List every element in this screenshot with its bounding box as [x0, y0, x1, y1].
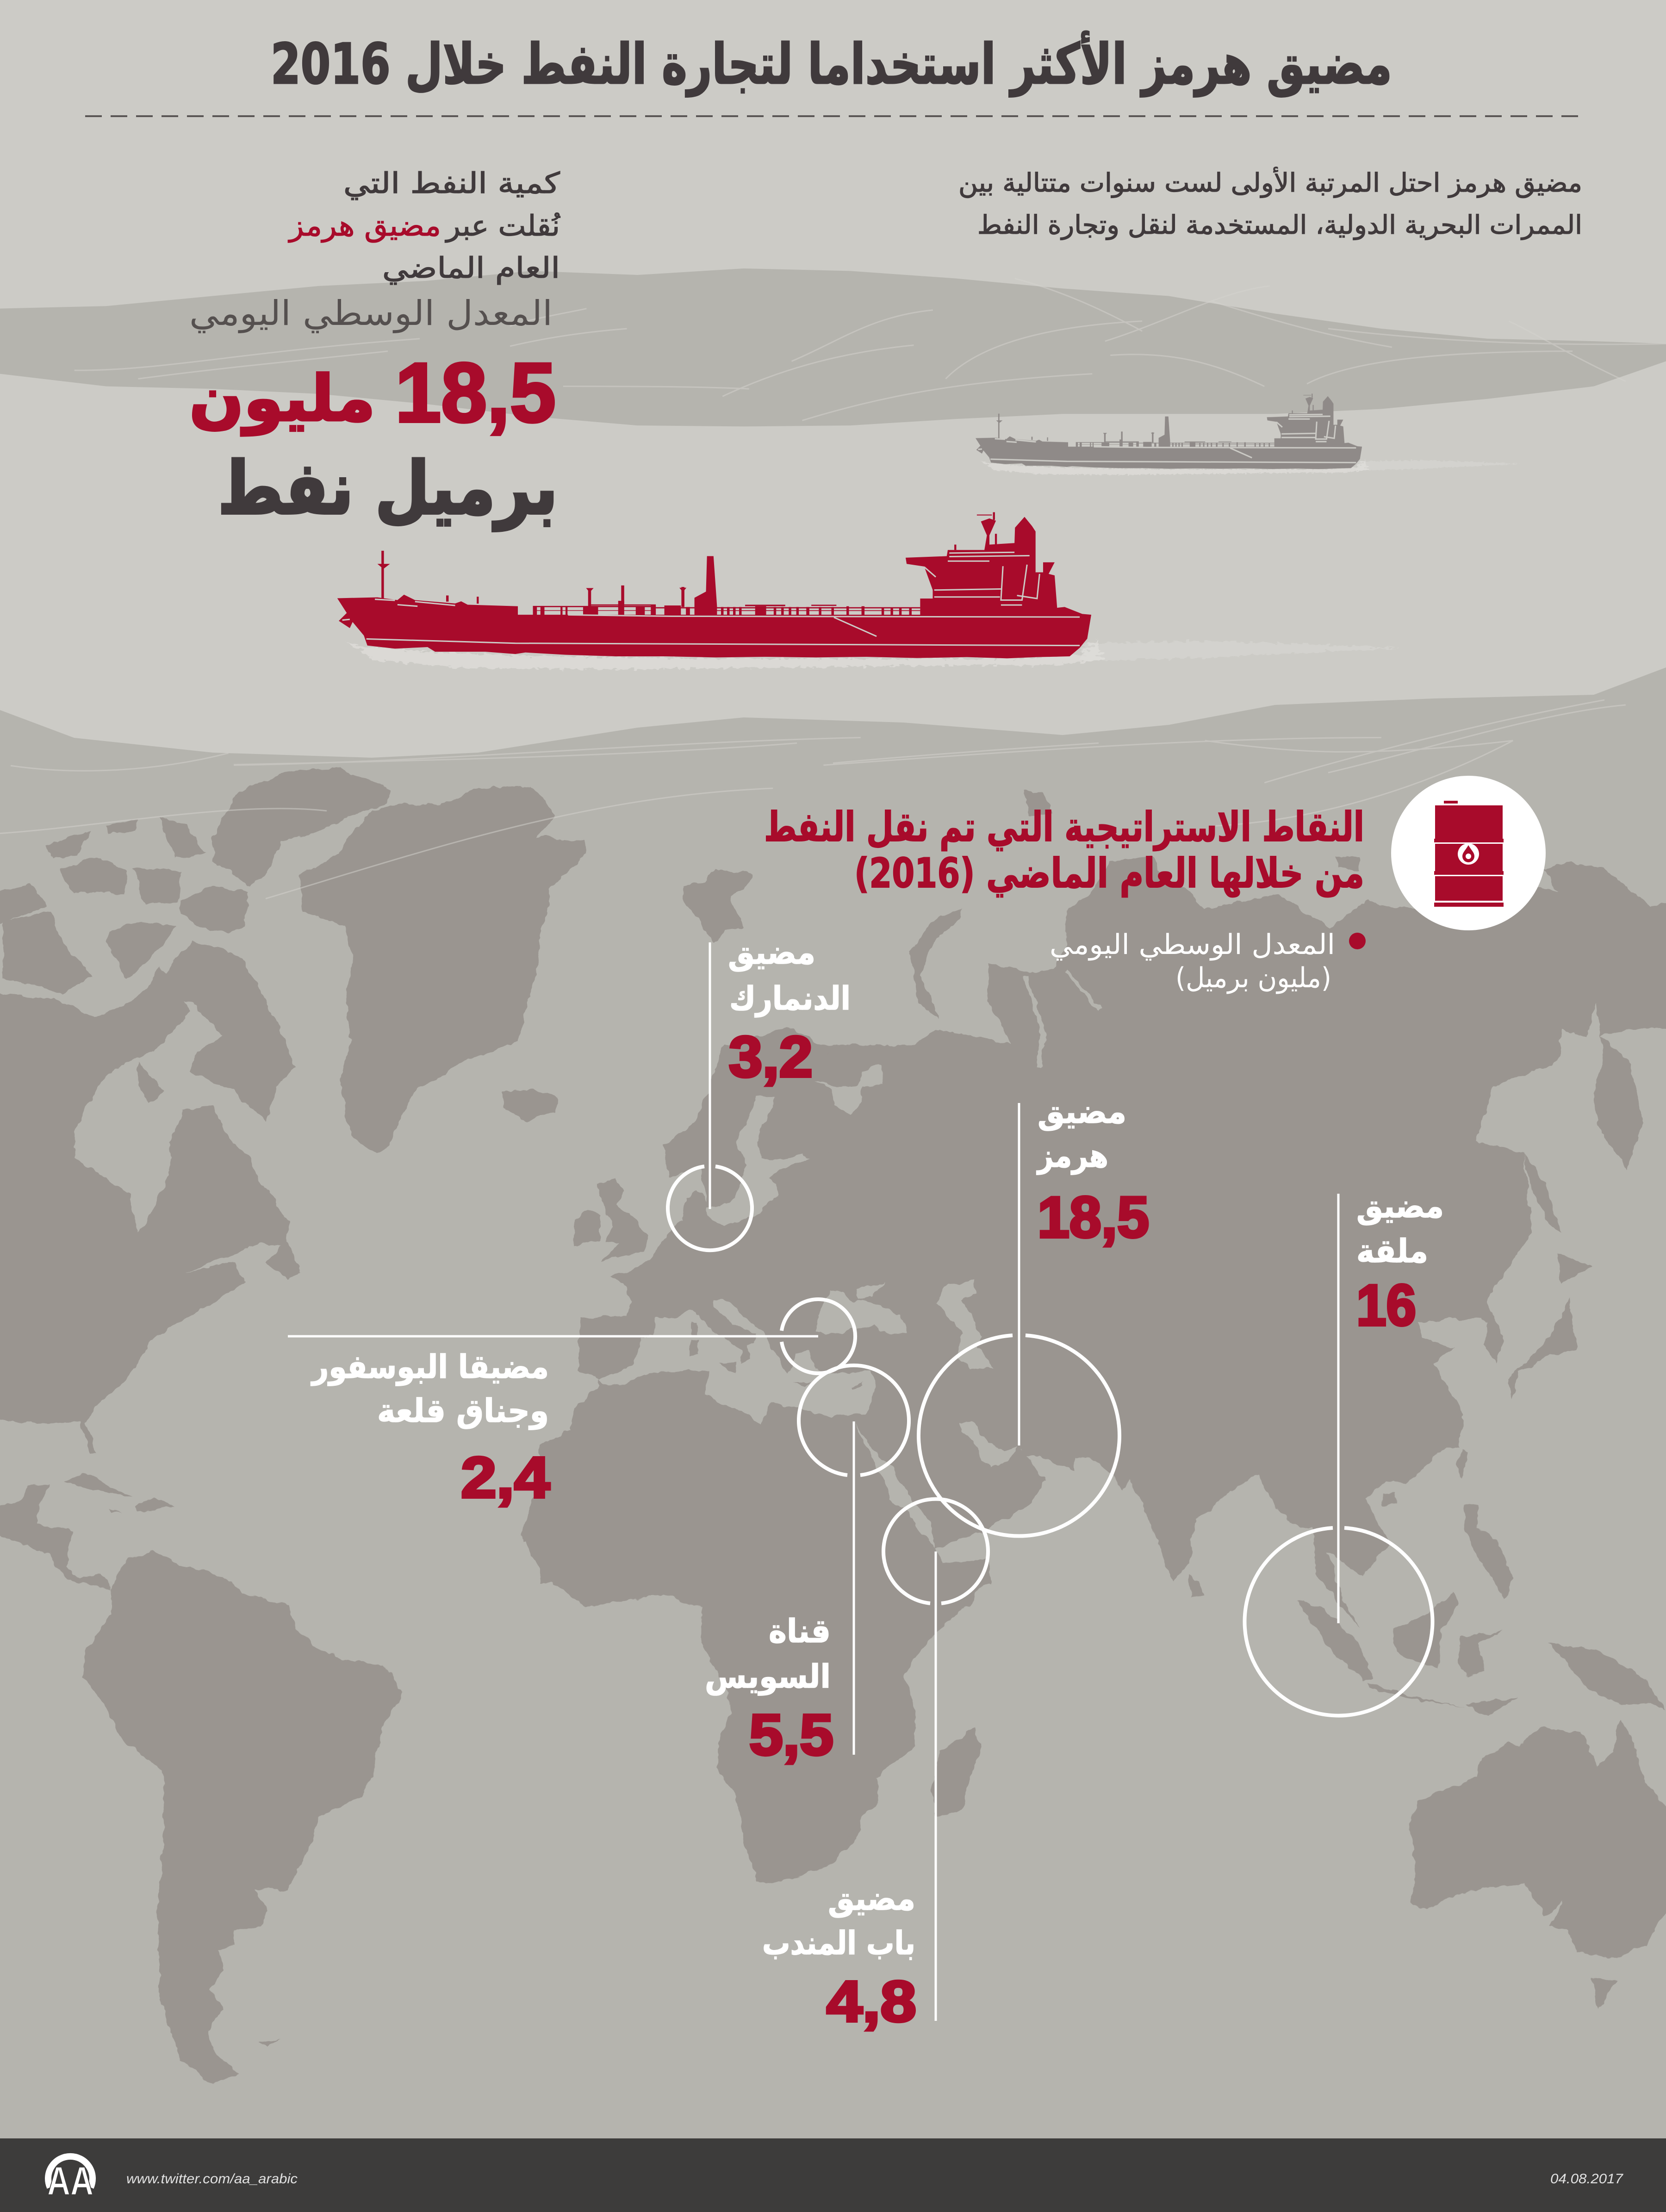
label: Danish straits 3.2 — [728, 934, 851, 1089]
text block: oil quantity: كمية النفط التي — [343, 166, 560, 200]
label: Hormuz 18.5: 18,5 — [1038, 1185, 1149, 1250]
footer: twitter link: www.twitter.com/aa_arabic — [126, 2171, 298, 2187]
legend — [1050, 928, 1366, 994]
big number: 18.5 million barrels: برميل نفط — [218, 446, 558, 531]
text block: oil quantity: نُقلت عبر — [445, 209, 560, 243]
background: lower water and map field — [0, 667, 1666, 2212]
footer: date: 04.08.2017 — [1550, 2171, 1623, 2187]
label: Suez 5.5: قناة — [769, 1612, 831, 1650]
title: مضيق هرمز الأكثر استخداما لتجارة النفط خلال 2016 — [271, 31, 1392, 97]
background: upper water band — [0, 268, 1666, 426]
label: Bab el Mandeb 4.8: باب المندب — [762, 1924, 915, 1962]
label: Malacca 16: ملقة — [1356, 1232, 1428, 1270]
map: seas cut into the land — [599, 971, 1100, 1548]
text block: oil quantity — [189, 166, 560, 333]
text block: oil quantity: مضيق هرمز — [288, 209, 441, 243]
map: land masses — [0, 768, 1666, 2084]
legend: (مليون برميل) — [1175, 962, 1331, 994]
big number: 18.5 million barrels: 18,5 — [395, 345, 556, 440]
footer bar — [0, 2138, 1666, 2212]
ship: red tanker — [337, 512, 1401, 669]
label: Bosphorus 2.4 — [311, 1348, 550, 1510]
label: Malacca 16: مضيق — [1356, 1187, 1444, 1225]
heading: strategic points — [764, 803, 1364, 897]
heading: strategic points: من خلالها العام الماضي (2016) — [854, 849, 1364, 897]
label: Danish straits 3.2: الدنمارك — [729, 979, 851, 1017]
big number: 18.5 million barrels: مليون — [189, 362, 375, 436]
logo: AA: AA — [47, 2159, 93, 2204]
label: Suez 5.5: 5,5 — [749, 1703, 833, 1767]
marker: Bosphorus — [288, 1299, 855, 1373]
ship: grey tanker in the distance — [976, 394, 1521, 475]
label: Bab el Mandeb 4.8: مضيق — [828, 1880, 915, 1918]
label: Bab el Mandeb 4.8: 4,8 — [827, 1969, 916, 2034]
marker: Suez — [799, 1365, 909, 1755]
label: Bosphorus 2.4: مضيقا البوسفور — [311, 1348, 549, 1386]
label: Malacca 16: 16 — [1356, 1273, 1416, 1338]
text block: oil quantity: المعدل الوسطي اليومي — [189, 293, 553, 333]
label: Danish straits 3.2: مضيق — [728, 934, 815, 972]
waves: thin light current lines — [0, 279, 1666, 898]
label: Suez 5.5 — [705, 1612, 833, 1767]
marker: Hormuz — [919, 1103, 1119, 1536]
intro text: مضيق هرمز احتل المرتبة الأولى لست سنوات متتالية بين — [958, 167, 1582, 198]
map: Mediterranean lands and islands — [690, 1307, 864, 1389]
legend: المعدل الوسطي اليومي — [1050, 928, 1335, 961]
label: Bosphorus 2.4: وجناق قلعة — [377, 1392, 549, 1430]
big number: 18.5 million barrels — [189, 345, 558, 531]
label: Hormuz 18.5: مضيق — [1038, 1093, 1126, 1131]
marker: Danish straits — [668, 942, 752, 1250]
label: Malacca 16 — [1356, 1187, 1444, 1338]
icon: oil barrel — [1391, 776, 1546, 930]
label: Hormuz 18.5: هرمز — [1036, 1137, 1108, 1175]
marker: Bab el Mandeb — [883, 1499, 988, 2021]
intro text: الممرات البحرية الدولية، المستخدمة لنقل وتجارة النفط — [977, 210, 1582, 240]
label: Bosphorus 2.4: 2,4 — [461, 1446, 550, 1510]
title divider — [85, 115, 1581, 117]
intro text — [958, 167, 1582, 240]
marker: Malacca — [1244, 1194, 1433, 1716]
world map — [0, 768, 1666, 2084]
heading: strategic points: النقاط الاستراتيجية التي تم نقل النفط — [764, 803, 1364, 851]
label: Hormuz 18.5 — [1036, 1093, 1149, 1250]
label: Suez 5.5: السويس — [705, 1657, 831, 1695]
label: Danish straits 3.2: 3,2 — [729, 1025, 813, 1089]
text block: oil quantity: العام الماضي — [382, 251, 560, 285]
label: Bab el Mandeb 4.8 — [762, 1880, 916, 2034]
